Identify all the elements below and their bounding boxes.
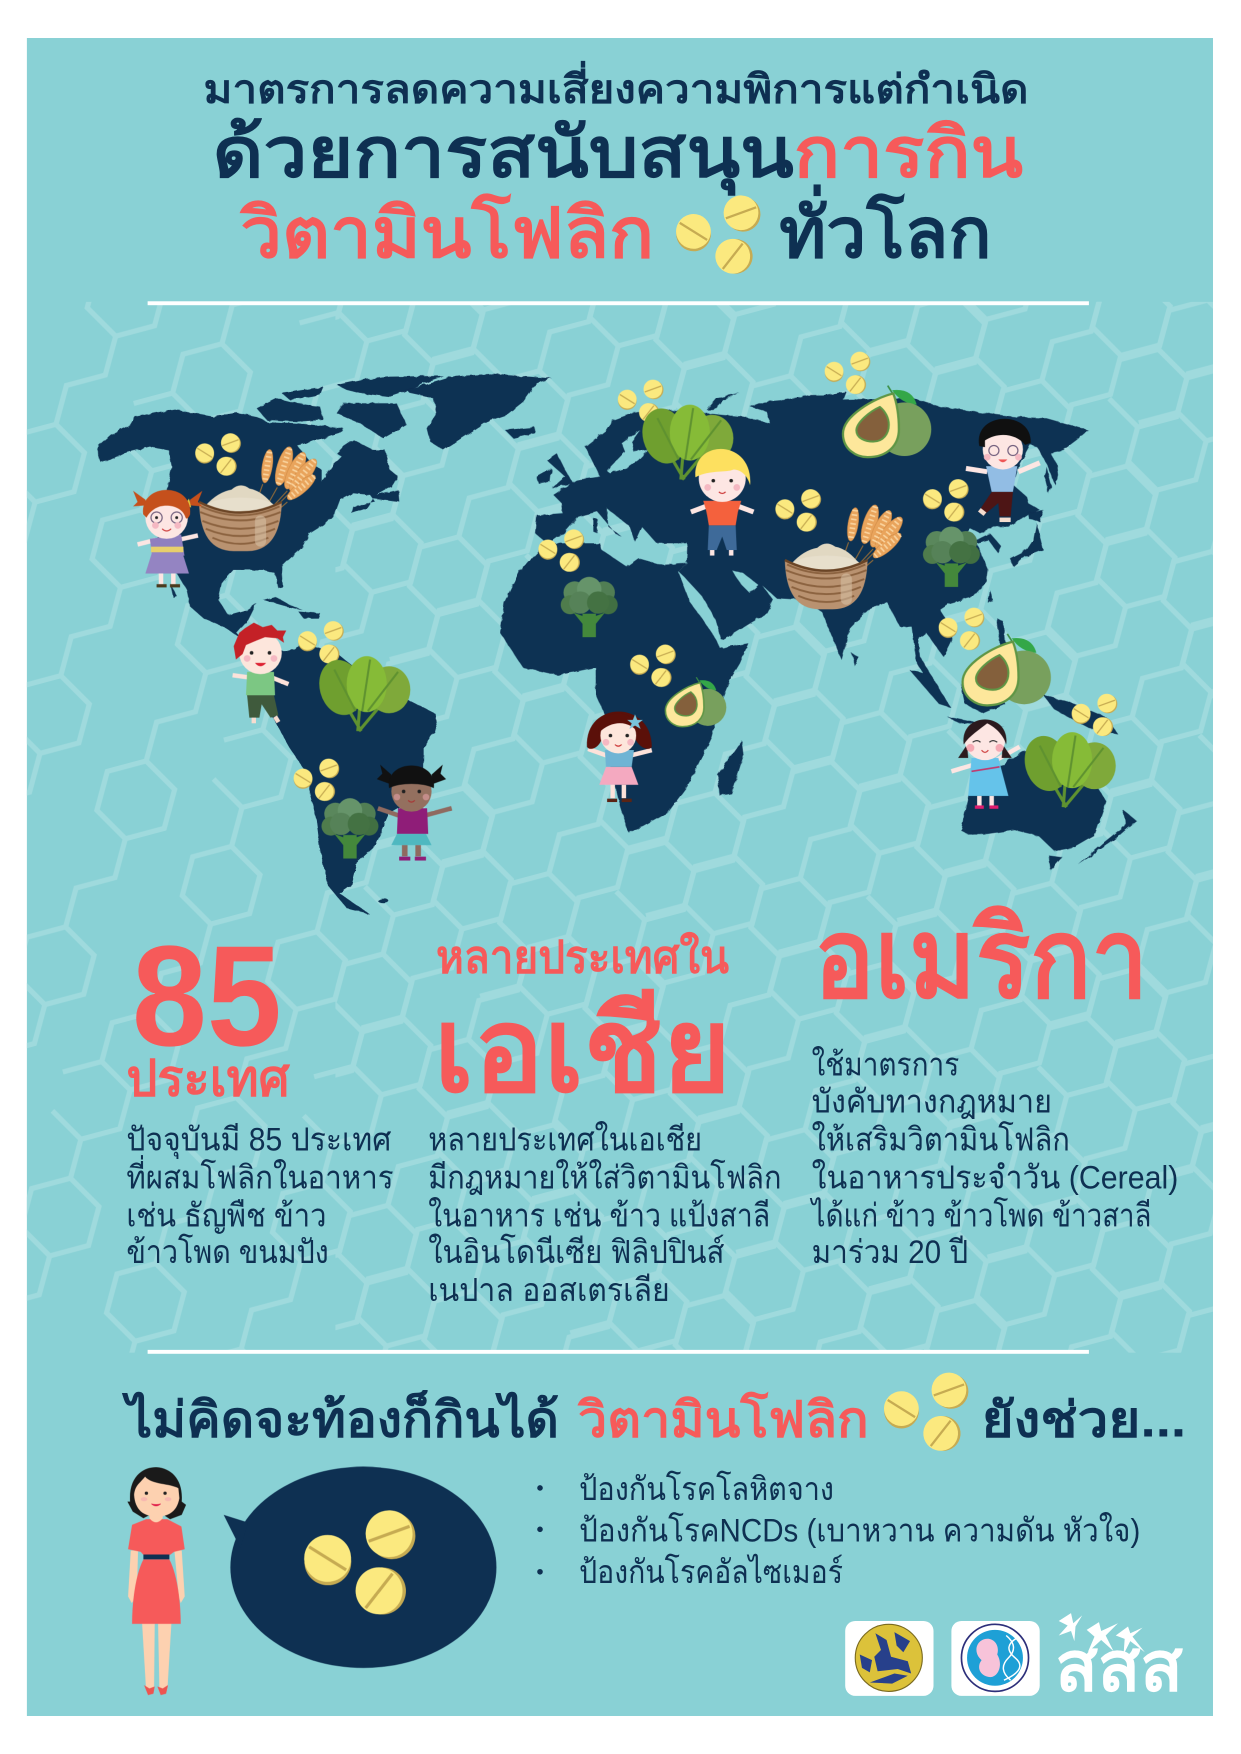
- stat: many countries in Asia: เนปาล ออสเตรเลีย: [428, 1272, 670, 1308]
- heading: folic benefits: ไม่คิดจะท้องก็กินได้: [121, 1390, 559, 1448]
- stat: America: [809, 896, 1178, 1270]
- stat: 85 countries: ปัจจุบันมี 85 ประเทศ: [126, 1121, 392, 1159]
- benefits list: [537, 1470, 1140, 1590]
- benefits list: ป้องกันโรคNCDs (เบาหวาน ความดัน หัวใจ): [579, 1512, 1140, 1549]
- stat: America: อเมริกา: [814, 896, 1148, 1021]
- stat: many countries in Asia: [428, 931, 781, 1308]
- child 5: blond boy: [691, 449, 754, 556]
- logo: department seal: [845, 1621, 934, 1696]
- map: south america: [240, 633, 437, 914]
- stat: America: ใช้มาตรการ: [812, 1045, 959, 1082]
- title: ทั่วโลก: [779, 184, 992, 272]
- benefits list: ป้องกันโรคอัลไซเมอร์: [579, 1553, 843, 1590]
- map: islands, australia: [718, 618, 1136, 870]
- icon: spinach: [313, 403, 1116, 807]
- icon: broccoli: [321, 527, 980, 859]
- heading: folic benefits: [121, 1390, 1186, 1448]
- stat: 85 countries: เช่น ธัญพืช ข้าว: [126, 1197, 326, 1233]
- divider top: [148, 301, 1089, 305]
- stat: America: มาร่วม 20 ปี: [812, 1234, 968, 1270]
- benefits list: ป้องกันโรคโลหิตจาง: [579, 1470, 834, 1507]
- child 3: dark-haired girl: [377, 765, 452, 859]
- title: วิตามินโฟลิก: [239, 192, 654, 272]
- map: north america, greenland: [97, 374, 552, 640]
- world map: [97, 374, 1136, 914]
- heading: folic benefits: วิตามินโฟลิก: [577, 1391, 869, 1448]
- stat: America: ในอาหารประจำวัน (Cereal): [812, 1158, 1178, 1195]
- map: eurasia, africa: [500, 392, 1088, 832]
- stat: many countries in Asia: ในอินโดนีเซีย ฟิลิปปินส์: [428, 1233, 725, 1270]
- divider bottom: [148, 1350, 1089, 1354]
- logo: ThaiHealth: สสส: [1055, 1627, 1184, 1705]
- icon: heading pills: [876, 1367, 973, 1459]
- icon: avocados: [665, 386, 1051, 727]
- title: มาตรการลดความเสี่ยงความพิการแต่กำเนิด: [204, 60, 1029, 112]
- hexagon background pattern: [27, 302, 1213, 1353]
- stat: 85 countries: ที่ผสมโฟลิกในอาหาร: [126, 1154, 394, 1195]
- stat: 85 countries: 85: [132, 916, 282, 1076]
- icon: pills scattered on map: [191, 349, 1120, 805]
- stat: 85 countries: ประเทศ: [126, 1050, 291, 1107]
- stat: 85 countries: [126, 916, 394, 1270]
- stat: 85 countries: ข้าวโพด ขนมปัง: [126, 1233, 329, 1270]
- title: [204, 60, 1029, 272]
- stat: many countries in Asia: หลายประเทศใน: [436, 931, 729, 983]
- icon: title pills: [668, 190, 765, 282]
- child 1: girl with glasses: [133, 490, 202, 586]
- logo: birth defects association: [951, 1621, 1040, 1696]
- stat: America: บังคับทางกฎหมาย: [812, 1083, 1052, 1119]
- stat: many countries in Asia: มีกฎหมายให้ใส่วิตามินโฟลิก: [428, 1158, 781, 1195]
- icon: bowls of grain: [199, 445, 907, 609]
- speech bubble with pills: [224, 1467, 496, 1668]
- title: ด้วยการสนับสนุน: [212, 114, 794, 197]
- child 6: boy with black hair and glasses: [966, 419, 1040, 520]
- child 7: girl in blue dress: [951, 719, 1020, 807]
- stat: many countries in Asia: เอเชีย: [434, 985, 731, 1117]
- stat: America: ให้เสริมวิตามินโฟลิก: [812, 1120, 1070, 1157]
- child 2: red-haired boy: [233, 623, 288, 723]
- title: การกิน: [794, 114, 1023, 192]
- heading: folic benefits: ยังช่วย...: [982, 1393, 1186, 1448]
- stat: America: ได้แก่ ข้าว ข้าวโพด ข้าวสาลี: [809, 1196, 1152, 1233]
- child 4: girl with curly hair: [587, 712, 652, 800]
- stat: many countries in Asia: ในอาหาร เช่น ข้าว แป้งสาลี: [428, 1196, 770, 1233]
- woman figure: [127, 1467, 186, 1695]
- stat: many countries in Asia: หลายประเทศในเอเชีย: [428, 1120, 702, 1157]
